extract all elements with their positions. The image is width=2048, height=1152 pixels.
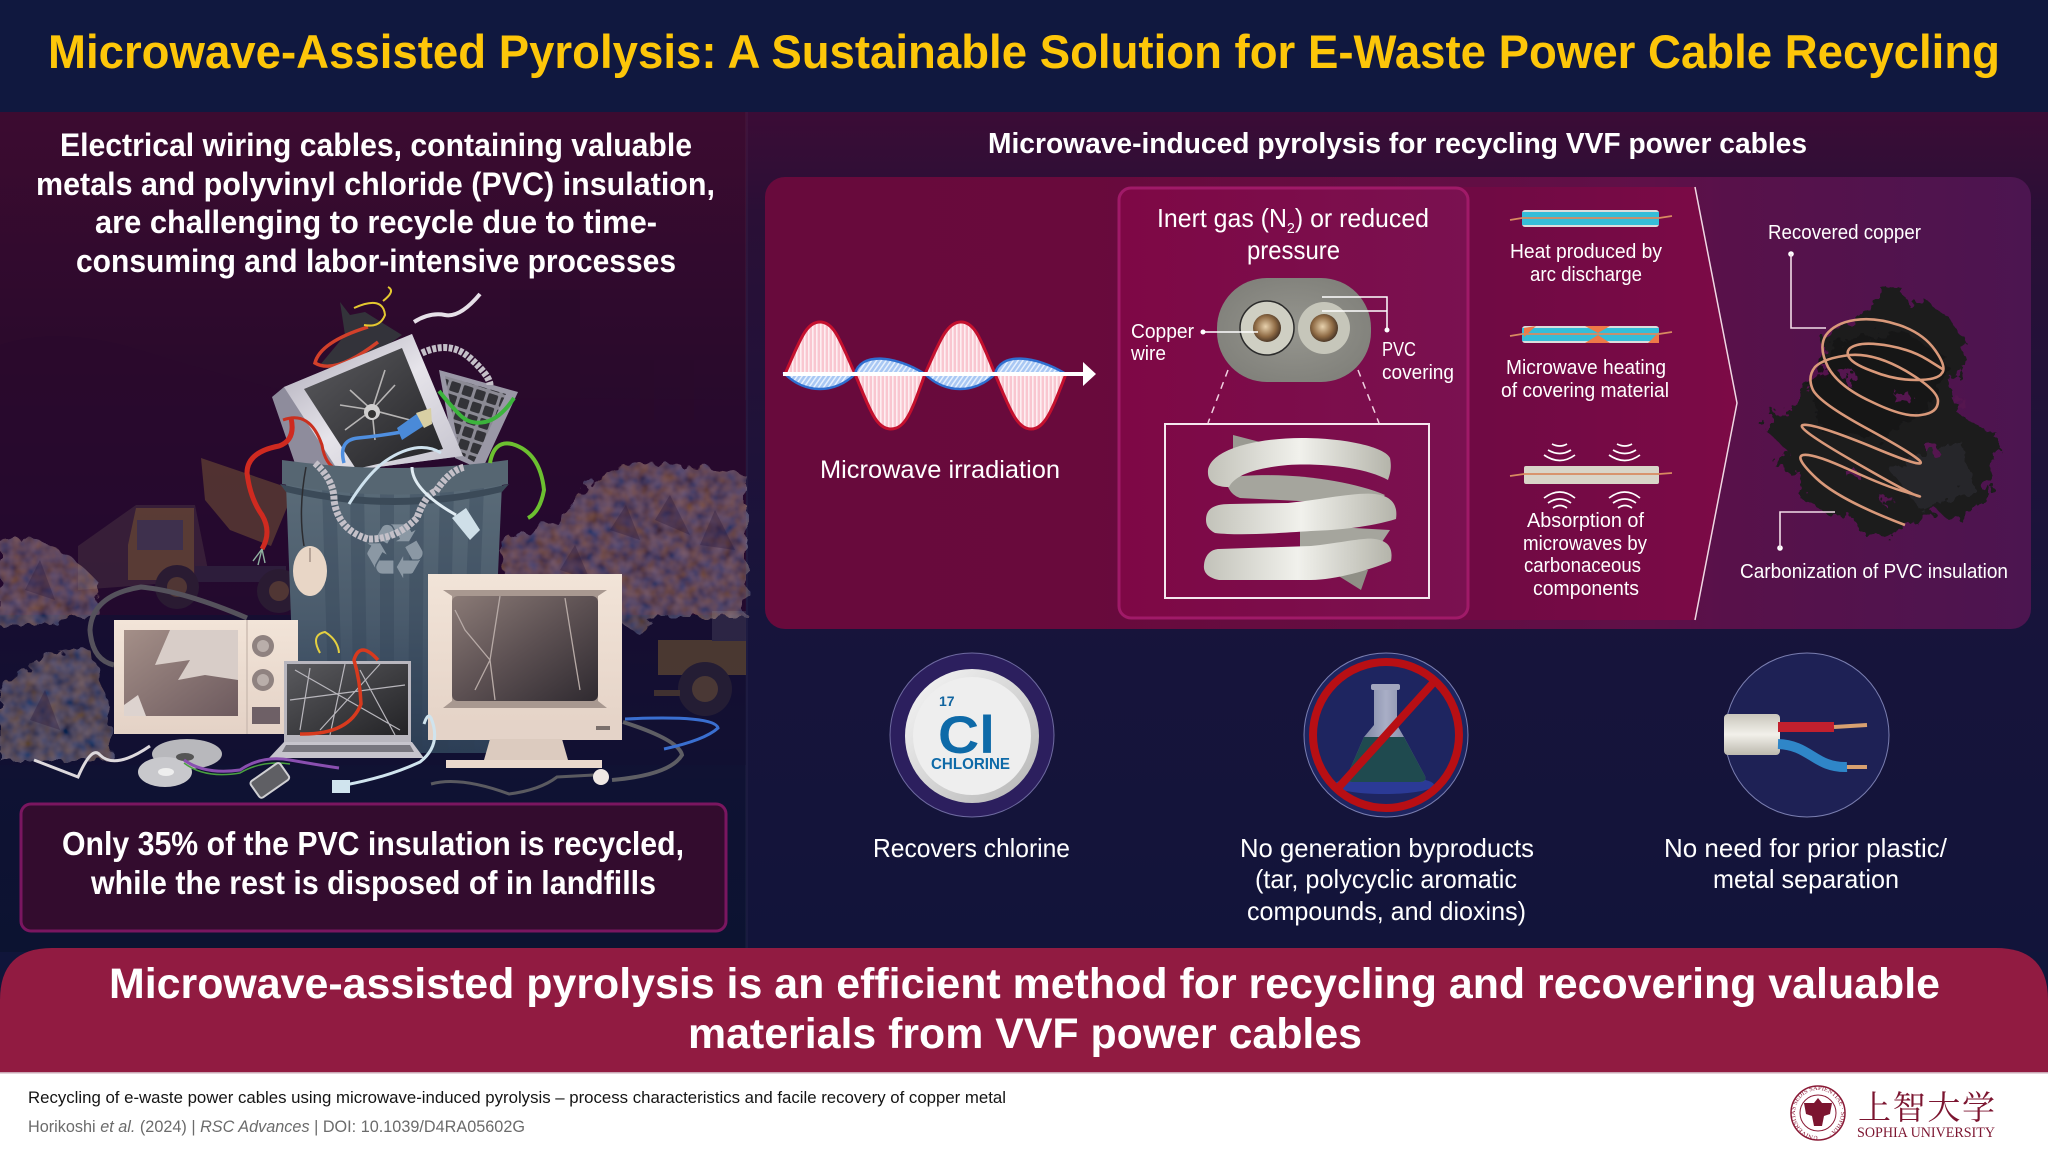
recovered copper label: Recovered copper — [1768, 222, 1921, 244]
separation label — [1664, 833, 1948, 894]
citation reference: Horikoshi et al. (2024) | RSC Advances | DOI: 10.1039/D4RA05602G — [28, 1117, 525, 1136]
separation label: metal separation — [1713, 864, 1899, 894]
left problem statement text: Electrical wiring cables, containing valuable — [60, 127, 692, 163]
mechanism: absorption by carbonaceous components: Absorption of — [1527, 510, 1644, 532]
curly cord on bin — [315, 463, 465, 539]
carbonization leader line — [1777, 512, 1835, 551]
mechanism: absorption by carbonaceous components: components — [1533, 578, 1639, 600]
coiled cord top — [422, 348, 490, 385]
byproducts label: (tar, polycyclic aromatic — [1255, 864, 1517, 894]
mechanism: arc discharge: arc discharge — [1530, 264, 1642, 286]
blue right wire — [625, 718, 718, 749]
mechanism: microwave heating: of covering material — [1501, 380, 1669, 402]
broken monitor — [272, 334, 463, 478]
usb cable — [349, 448, 480, 540]
dump truck silhouette — [78, 458, 301, 613]
coloured wire bundle — [184, 759, 339, 771]
inert gas heading: 2 — [1287, 220, 1295, 237]
microwave arcs — [1544, 444, 1640, 508]
mechanism: microwave heating: Microwave heating — [1506, 357, 1666, 379]
conclusion banner: Microwave-assisted pyrolysis is an efficient method for recycling and recovering valuable — [109, 960, 1940, 1008]
mechanism: absorption by carbonaceous components: carbonaceous — [1524, 555, 1641, 577]
title: Microwave-Assisted Pyrolysis: A Sustainable Solution for E-Waste Power Cable Recycling — [48, 25, 2000, 78]
floor wires and discs — [34, 716, 718, 799]
smartphone — [249, 762, 290, 799]
byproducts label: No generation byproducts — [1240, 833, 1534, 863]
conclusion banner — [0, 948, 2048, 1072]
byproducts label — [1240, 833, 1534, 926]
mechanism: arc discharge: Heat produced by — [1510, 241, 1662, 263]
background landfill scene — [0, 290, 746, 765]
red loop wire — [315, 327, 378, 366]
grey right cable — [612, 722, 682, 780]
icon: chlorine element: Cl — [938, 706, 995, 765]
conclusion banner: materials from VVF power cables — [688, 1010, 1362, 1058]
garbage piles — [0, 462, 746, 760]
carbonized residue — [1765, 285, 2001, 537]
mechanism: arc discharge — [1510, 210, 1672, 286]
green wire — [490, 443, 544, 518]
cracked crt monitor — [428, 574, 622, 768]
byproducts label: compounds, and dioxins) — [1247, 896, 1526, 926]
mechanism: microwave heating — [1501, 326, 1672, 402]
left problem statement text: metals and polyvinyl chloride (PVC) insulation, — [36, 166, 715, 202]
left problem statement text: are challenging to recycle due to time- — [95, 204, 657, 240]
power plug — [593, 769, 609, 785]
logo: sophia university: UNIVERSITAS SEDIS SAPIENTIAE · SOPHIA · — [1792, 1086, 1844, 1140]
benefit: no byproducts — [1240, 653, 1534, 926]
left problem statement text: consuming and labor-intensive processes — [76, 243, 676, 279]
carbonization label: Carbonization of PVC insulation — [1740, 561, 2008, 583]
separation label: No need for prior plastic/ — [1664, 833, 1948, 863]
microwave irradiation label: Microwave irradiation — [820, 456, 1060, 484]
logo: sophia university: 上智大学 — [1858, 1082, 1995, 1129]
pvc covering label — [1322, 297, 1454, 384]
icon: stripped cable — [1724, 653, 1889, 817]
grey floor cable — [431, 775, 594, 794]
grey power cable — [90, 587, 247, 665]
mechanism: absorption by carbonaceous components: microwaves by — [1523, 533, 1647, 555]
panel: inert atmosphere — [1119, 188, 1468, 618]
inert gas heading: pressure — [1247, 235, 1340, 265]
footer — [0, 1072, 2048, 1152]
compact discs — [138, 739, 222, 787]
inset: coiled cable — [1165, 424, 1429, 598]
panel: e-waste problem — [0, 112, 748, 952]
callout: only 35 percent recycled: while the rest is disposed of in landfills — [90, 864, 656, 901]
cable cross section — [1217, 278, 1371, 382]
icon: prohibited flask — [1304, 653, 1468, 817]
recycle symbol: ♻ — [361, 507, 429, 596]
ethernet cable — [343, 408, 432, 463]
chlorine label: Recovers chlorine — [873, 833, 1070, 863]
illustration: e-waste bin — [34, 287, 718, 799]
icon: chlorine element: 17 — [939, 693, 955, 709]
icon: chlorine element — [890, 653, 1054, 817]
logo: sophia university: SOPHIA UNIVERSITY — [1857, 1125, 1995, 1141]
callout: only 35 percent recycled: Only 35% of the PVC insulation is recycled, — [62, 825, 684, 862]
broken laptop — [269, 661, 424, 758]
panel: pyrolysis process — [765, 177, 2031, 629]
trash can — [280, 460, 509, 753]
laptop red wire — [300, 650, 378, 734]
panel: right background — [746, 112, 2048, 952]
copper leader line — [1788, 251, 1826, 328]
left problem statement text — [36, 127, 715, 279]
pvc covering label: covering — [1382, 362, 1454, 384]
white wire — [414, 294, 480, 322]
keyboard — [439, 370, 518, 470]
mouse — [293, 467, 327, 596]
copper wire label — [1130, 321, 1258, 365]
inert gas heading — [1157, 203, 1429, 265]
right heading: Microwave-induced pyrolysis for recycling VVF power cables — [988, 128, 1807, 160]
white wire on floor — [34, 746, 150, 777]
broken microwave — [114, 620, 298, 734]
copper wire label: Copper — [1131, 321, 1194, 343]
keyboard green wire — [439, 391, 514, 423]
yellow and blue wires — [354, 287, 391, 326]
logo: sophia university — [1790, 1082, 1995, 1141]
recovered copper coil — [1800, 319, 1944, 525]
red cable — [247, 418, 292, 549]
citation title: Recycling of e-waste power cables using microwave-induced pyrolysis – process characteristics and facile recovery of copper metal — [28, 1088, 1006, 1107]
copper wire label: wire — [1130, 343, 1166, 365]
usb floor cable — [332, 716, 435, 793]
dark object in bin — [320, 302, 402, 375]
small yellow wire — [316, 632, 339, 653]
bulldozer silhouette — [654, 611, 746, 716]
pvc covering label: PVC — [1382, 339, 1416, 361]
benefit: recovers chlorine — [873, 653, 1070, 863]
inert gas heading: ) or reduced — [1295, 203, 1429, 233]
dashed zoom lines — [1208, 370, 1379, 423]
trash bag shapes — [25, 495, 735, 730]
callout: only 35 percent recycled — [21, 804, 726, 931]
mechanism: absorption by carbonaceous components — [1510, 444, 1672, 600]
inert gas heading: Inert gas (N — [1157, 203, 1293, 233]
title bar — [0, 0, 2048, 112]
microwave wave diagram — [783, 322, 1096, 429]
icon: chlorine element: CHLORINE — [931, 756, 1010, 773]
benefit: no prior separation — [1664, 653, 1948, 894]
